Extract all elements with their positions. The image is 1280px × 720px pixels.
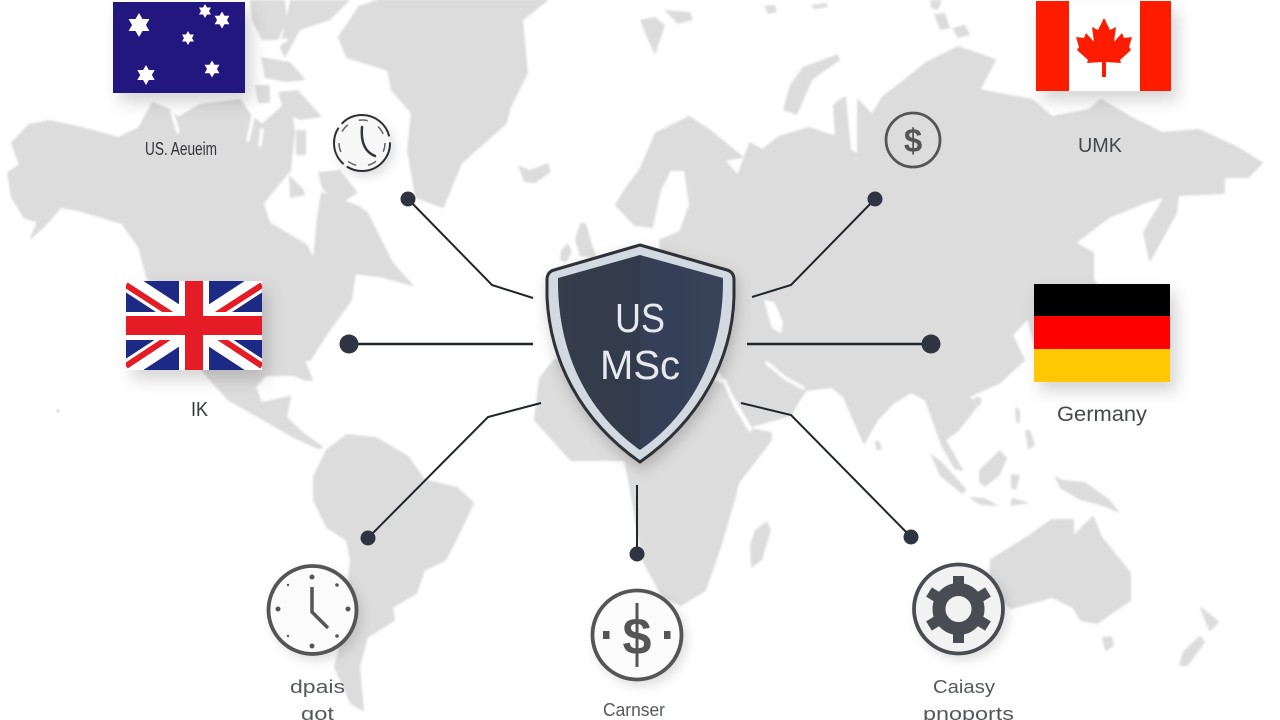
map: North America (8, 100, 412, 448)
label: clock caption: dpais (290, 677, 345, 697)
icon: clock (268, 566, 356, 654)
connector: top right (752, 192, 882, 297)
shield face (558, 255, 723, 450)
icon: dollar top right: $ (904, 122, 922, 159)
label: top right: UMK (1078, 135, 1123, 157)
flag: Germany (1034, 284, 1170, 382)
label: clock caption (290, 677, 345, 720)
label: gear caption: Caiasy (933, 677, 995, 697)
map: South America (314, 435, 473, 710)
map: speck (57, 410, 59, 412)
label: gear caption (923, 677, 1014, 720)
map: Iceland and British Isles (518, 163, 597, 262)
shield text (600, 295, 680, 388)
icon: dollar coin (592, 590, 682, 680)
map: Australia and New Zealand (990, 517, 1218, 665)
map: Southeast Asia islands (875, 397, 1120, 513)
label: Germany: Germany (1057, 403, 1148, 426)
icon: dollar coin: $ (623, 608, 652, 666)
map: inland seas (764, 300, 783, 333)
icon: sketch clock top left (334, 115, 390, 171)
map: Novaya Zemlya and northern islands (640, 0, 970, 115)
map: Africa (535, 350, 771, 605)
label: UK: IK (191, 399, 209, 421)
label: top left: US. Aeueim (145, 139, 217, 159)
label: dollar caption: Carnser (603, 700, 665, 720)
connector: bottom left (360, 403, 541, 546)
connector: top left (400, 192, 533, 298)
shield text: US (615, 295, 665, 341)
icon: gear (914, 564, 1003, 654)
map: Eurasia (616, 47, 1262, 470)
flag: Canada (1036, 1, 1171, 91)
connector: middle right (747, 334, 940, 354)
map: Madagascar (750, 521, 771, 568)
shield outer ring (547, 245, 734, 462)
flag: Australia (113, 2, 245, 93)
map: inlets (172, 40, 803, 430)
icon: dollar top right (886, 113, 940, 167)
connector lines (340, 192, 940, 562)
flag: United Kingdom (126, 281, 262, 370)
map: Greenland (339, 0, 547, 207)
connector: middle left (340, 334, 533, 354)
connector: bottom right (741, 403, 918, 544)
shield badge (547, 245, 734, 462)
map: Arctic islands (250, 0, 358, 205)
shield text: MSc (600, 342, 680, 388)
connector: bottom centre (630, 485, 644, 562)
